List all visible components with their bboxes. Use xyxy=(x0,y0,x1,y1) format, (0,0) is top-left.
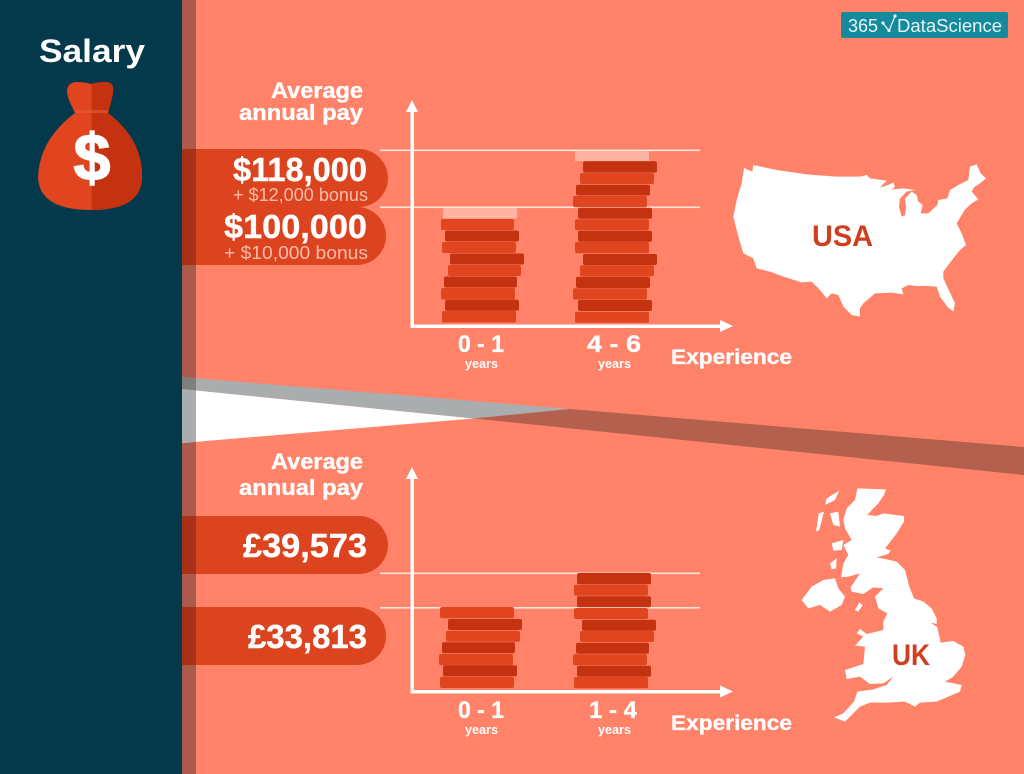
logo badge: 365 xyxy=(848,16,878,36)
USA pill: 118,000: + $12,000 bonus xyxy=(233,185,368,205)
panel: UK xyxy=(182,449,965,737)
USA chart axes xyxy=(406,100,733,332)
UK pill: 33,813 xyxy=(182,607,386,665)
icon: money bag: $ xyxy=(74,120,110,194)
sidebar shadow strip xyxy=(182,0,196,774)
USA coin stack 0-1 years xyxy=(441,208,524,322)
UK pill: 39,573: £39,573 xyxy=(243,527,367,564)
UK salary reference lines xyxy=(380,572,700,609)
USA axis heading xyxy=(239,78,364,125)
USA coin stack 4-6 years xyxy=(573,151,657,323)
UK x labels xyxy=(458,697,792,737)
UK axis heading: annual pay xyxy=(239,475,364,500)
diagonal divider xyxy=(182,377,1024,475)
USA axis heading: annual pay xyxy=(239,100,364,125)
map: USA xyxy=(733,164,986,317)
USA x labels: years xyxy=(465,356,498,371)
UK pill: 33,813: £33,813 xyxy=(248,618,367,655)
UK x labels: Experience xyxy=(671,712,792,735)
map: UK xyxy=(802,488,965,722)
USA axis heading: Average xyxy=(271,78,363,103)
UK x labels: 0 - 1 xyxy=(458,697,504,724)
UK coin stack 1-4 years xyxy=(573,573,656,688)
left sidebar xyxy=(0,0,182,774)
USA pill: 118,000: $118,000 xyxy=(233,151,367,188)
logo badge xyxy=(841,12,1008,38)
USA pill: 100,000 xyxy=(182,207,386,265)
USA pill: 100,000: + $10,000 bonus xyxy=(224,243,368,263)
panel: USA xyxy=(182,78,986,371)
USA x labels xyxy=(458,331,792,371)
UK x labels: years xyxy=(598,722,631,737)
UK chart axes xyxy=(406,467,733,698)
USA map label: USA xyxy=(812,220,873,253)
UK axis heading xyxy=(239,449,364,500)
USA pill: 100,000: $100,000 xyxy=(224,208,367,245)
UK pill: 39,573 xyxy=(182,516,388,574)
UK coin stack 0-1 years xyxy=(439,607,522,688)
USA x labels: 4 - 6 xyxy=(587,331,641,358)
UK x labels: years xyxy=(465,722,498,737)
icon: money bag xyxy=(38,82,142,210)
UK x labels: 1 - 4 xyxy=(589,697,638,724)
USA x labels: Experience xyxy=(671,346,792,369)
salary title: Salary xyxy=(39,33,145,69)
USA x labels: 0 - 1 xyxy=(458,331,504,358)
USA x labels: years xyxy=(598,356,631,371)
UK axis heading: Average xyxy=(271,449,363,474)
logo badge: DataScience xyxy=(897,16,1002,36)
UK map label: UK xyxy=(892,639,930,672)
USA salary reference lines xyxy=(380,150,700,208)
USA pill: 118,000 xyxy=(182,149,388,207)
